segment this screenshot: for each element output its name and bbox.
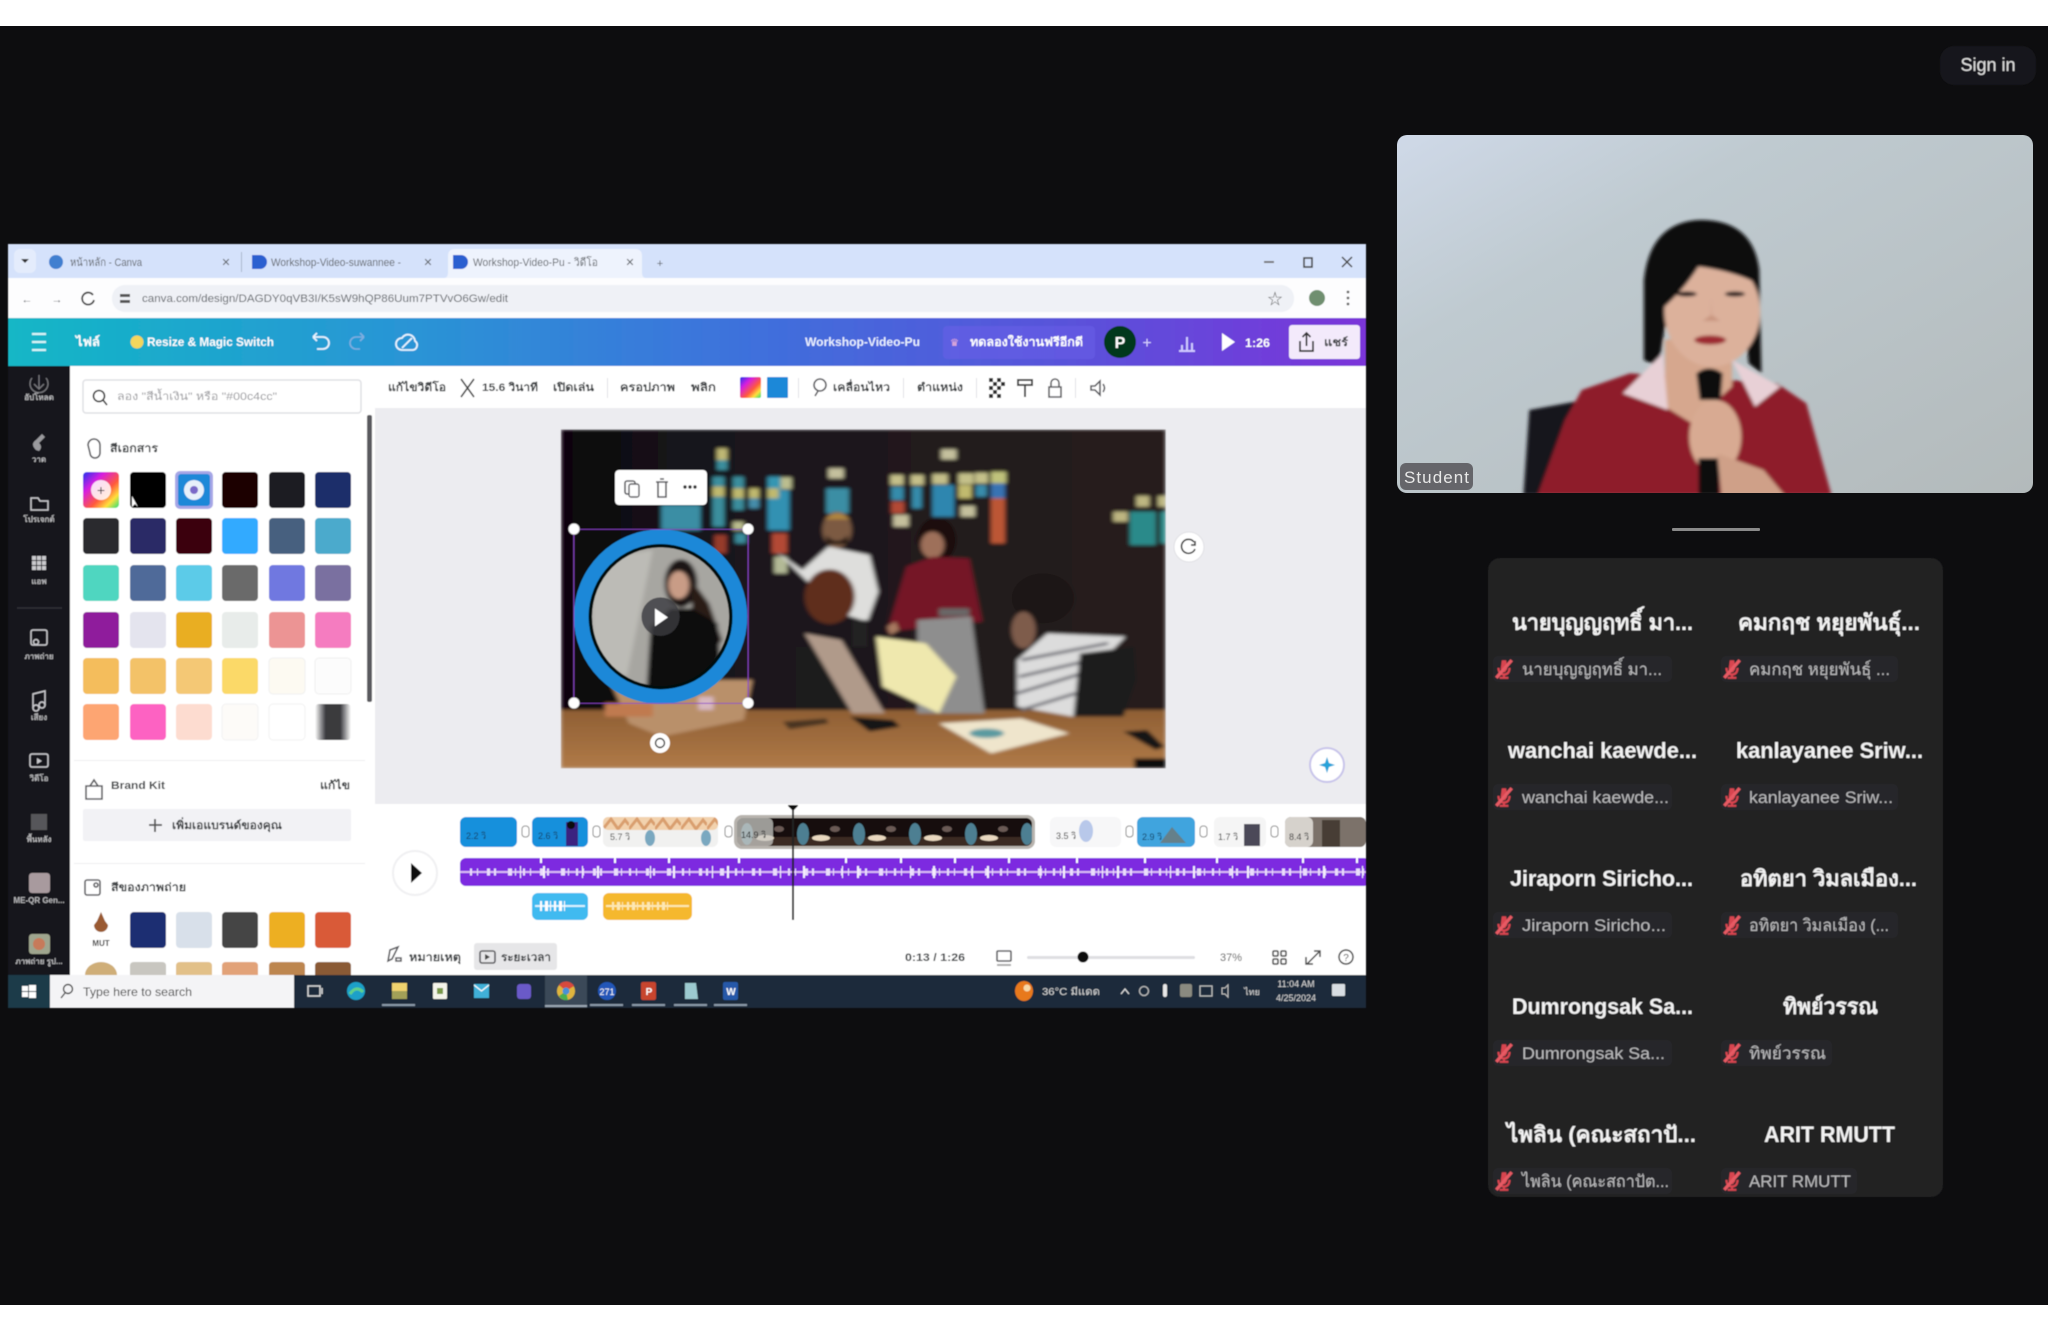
participant: thippawan: ทิพย์วรรณ — [1749, 1044, 1826, 1063]
system tray: 4/25/2024 — [1276, 993, 1316, 1003]
left navigation sidebar: ภาพถ่าย รูป... — [15, 957, 63, 967]
extra audio clips — [532, 893, 692, 920]
editing toolbar: เคลื่อนไหว — [833, 379, 890, 394]
system tray: 36°C มีแดด — [1042, 986, 1100, 998]
left navigation sidebar: โปรเจกต์ — [22, 514, 55, 524]
brand kit row: แก้ไข — [320, 778, 350, 792]
participant: atittaya: อทิตยา วิมลเมือง... — [1740, 866, 1917, 891]
icon: start button — [22, 985, 36, 998]
sign in button: Sign in — [1960, 55, 2016, 75]
presenter figure — [1520, 218, 1834, 493]
timeline footer controls: ? — [1343, 953, 1349, 964]
editing toolbar: 15.6 วินาที — [482, 381, 538, 394]
video clips: 2.2 วิ — [466, 831, 486, 841]
image colours heading: สีของภาพถ่าย — [111, 881, 186, 894]
colour search box — [83, 380, 361, 413]
panel: video timeline — [375, 798, 1370, 975]
browser tab bar: หน้าหลัก - Canva — [70, 257, 143, 269]
left navigation sidebar: พื้นหลัง — [27, 833, 52, 844]
selection handles — [568, 524, 754, 708]
video clips: 8.4 วิ — [1289, 832, 1309, 842]
taskbar search box: Type here to search — [83, 985, 192, 999]
selection frame — [574, 529, 748, 703]
timeline footer controls — [388, 943, 1353, 970]
address bar: canva.com/design/DAGDY0qVB3I/K5sW9hQP86Uum7PTVvO6Gw/edit — [142, 293, 508, 305]
participant: pailin: ไพลิน (คณะสถาปั... — [1505, 1121, 1696, 1147]
participant: atittaya: อทิตยา วิมลเมือง (... — [1749, 916, 1889, 935]
participant: komkrit — [1721, 610, 1920, 682]
editing toolbar — [375, 366, 1366, 408]
meeting table — [561, 710, 1166, 768]
presenter webcam tile — [1397, 135, 2033, 495]
timeline footer controls: ระยะเวลา — [501, 952, 551, 964]
editing toolbar: ครอปภาพ — [620, 381, 675, 394]
image colour swatches: MUT — [92, 939, 110, 948]
timeline footer controls: 37% — [1220, 952, 1242, 964]
participant: boonyarit: นายบุญญฤทธิ์ มา... — [1522, 657, 1662, 680]
video clips: 2.9 วิ — [1142, 832, 1162, 842]
windows taskbar — [8, 975, 1366, 1008]
canva header bar: Workshop-Video-Pu — [805, 335, 920, 349]
participant: arit rmutt: ARIT RMUTT — [1749, 1172, 1851, 1191]
side colour panel — [70, 366, 375, 988]
refresh comment button — [1174, 532, 1204, 562]
taskbar search box — [50, 975, 294, 1008]
participant: arit rmutt — [1721, 1122, 1896, 1194]
video clips: 2.6 วิ — [538, 831, 558, 841]
participant: pailin — [1493, 1121, 1696, 1194]
panel: shared browser window — [8, 244, 1370, 1008]
name tag: student — [1400, 463, 1473, 490]
browser tab bar: ✕ — [625, 257, 635, 269]
participant: dumrongsak: Dumrongsak Sa... — [1512, 994, 1693, 1019]
sticky notes on wall — [661, 448, 1166, 573]
canva header bar: Resize & Magic Switch — [147, 335, 274, 349]
play overlay — [641, 597, 680, 636]
browser tab bar: Workshop-Video-Pu - วิดีโอ — [473, 255, 598, 269]
participant: wanchai: wanchai kaewde... — [1521, 788, 1669, 807]
circular presenter video — [574, 529, 747, 704]
address bar: → — [52, 294, 62, 306]
canva header bar: 1:26 — [1245, 336, 1270, 350]
browser tab bar: Workshop-Video-suwannee - — [271, 257, 401, 269]
video page on canvas — [560, 428, 1166, 769]
canva header bar: + — [1142, 335, 1152, 352]
laptop and papers on table — [605, 680, 1166, 768]
name tag: student: Student — [1404, 468, 1469, 487]
document colour swatches — [83, 471, 351, 740]
top white strip — [0, 0, 2048, 26]
editing toolbar: แก้ไขวิดีโอ — [388, 380, 446, 394]
heading: document colours — [88, 439, 158, 458]
timeline play button — [393, 851, 437, 895]
taskbar app icons: 271 — [599, 987, 615, 997]
taskbar app icons — [308, 975, 747, 1008]
system tray: ไทย — [1243, 987, 1260, 997]
editing toolbar: พลิก — [691, 381, 716, 394]
browser tab bar: ✕ — [221, 257, 231, 269]
brand kit row: Brand Kit — [111, 780, 165, 792]
participant: komkrit: คมกฤช หยุยพันธุ์ ... — [1749, 660, 1890, 680]
left navigation sidebar: อัปโหลด — [24, 392, 54, 402]
timeline footer controls: หมายเหตุ — [409, 952, 461, 965]
video clips — [460, 815, 1366, 849]
participant: kanlayanee — [1721, 738, 1923, 810]
image colours heading — [85, 880, 186, 895]
add brand button: เพิ่มเอแบรนด์ของคุณ — [172, 817, 283, 833]
participant: atittaya — [1721, 866, 1917, 938]
participant: boonyarit — [1493, 606, 1693, 682]
participant: dumrongsak — [1493, 994, 1693, 1066]
participant: thippawan — [1721, 994, 1878, 1066]
participant: dumrongsak: Dumrongsak Sa... — [1522, 1044, 1665, 1063]
left navigation sidebar: แอพ — [31, 577, 47, 586]
video clips: 14.9 วิ — [741, 830, 766, 840]
canva header bar: แชร์ — [1324, 336, 1348, 349]
left navigation sidebar: วิดีโอ — [29, 773, 49, 783]
left navigation sidebar: วาด — [32, 455, 46, 464]
purple audio track — [460, 858, 1370, 886]
browser tab bar: + — [657, 258, 663, 270]
rotate handle — [650, 733, 670, 753]
taskbar app icons: W — [726, 987, 736, 998]
left navigation sidebar: ME-QR Gen... — [13, 896, 65, 905]
taskbar app icons: P — [646, 987, 653, 998]
people in meeting — [776, 512, 1136, 717]
participant: jiraporn — [1493, 866, 1693, 938]
participant: pailin: ไพลิน (คณะสถาปัต... — [1520, 1171, 1669, 1191]
browser tab bar — [8, 244, 1366, 278]
participant: jiraporn: Jiraporn Siricho... — [1510, 866, 1693, 891]
participant: arit rmutt: ARIT RMUTT — [1764, 1122, 1896, 1147]
address bar: ← — [22, 294, 32, 306]
canva header bar: ทดลองใช้งานฟรีอีกดี — [970, 334, 1083, 349]
address bar: ☆ — [1267, 291, 1283, 308]
left navigation sidebar: ภาพถ่าย — [24, 652, 54, 661]
editing toolbar: เปิดเล่น — [553, 381, 595, 394]
canva header bar: ♛ — [950, 338, 959, 349]
document colour swatches: + — [97, 482, 105, 498]
drag handle — [1672, 528, 1760, 531]
playhead — [788, 802, 798, 920]
video clips: 1.7 วิ — [1218, 832, 1238, 842]
canva header bar: ไฟล์ — [74, 334, 100, 349]
canva header bar — [8, 318, 1366, 366]
panel: participants — [1488, 558, 1943, 1197]
left navigation sidebar — [8, 366, 70, 975]
bottom white strip — [0, 1305, 2048, 1331]
participant: jiraporn: Jiraporn Siricho... — [1522, 916, 1666, 935]
participant: wanchai — [1493, 738, 1697, 810]
timeline footer controls: 0:13 / 1:26 — [905, 952, 965, 964]
heading: document colours: สีเอกสาร — [110, 442, 158, 455]
video clips: 5.7 วิ — [610, 832, 630, 842]
participant: komkrit: คมกฤช หยุยพันธุ์... — [1738, 610, 1920, 637]
floating element toolbar — [615, 470, 707, 505]
sign in button — [1940, 46, 2036, 85]
left navigation sidebar: เสียง — [31, 712, 47, 722]
participant: kanlayanee: kanlayanee Sriw... — [1749, 788, 1893, 807]
colour search box: ลอง "สีน้ำเงิน" หรือ "#00c4cc" — [117, 388, 277, 403]
browser tab bar: ✕ — [423, 257, 433, 269]
participant: wanchai: wanchai kaewde... — [1507, 738, 1697, 763]
image colour swatches — [85, 912, 351, 988]
magic assistant button — [1310, 748, 1344, 782]
video clips: 3.5 วิ — [1056, 831, 1076, 841]
canvas workspace background — [375, 408, 1366, 804]
system tray — [1015, 979, 1345, 1003]
address bar — [8, 278, 1366, 318]
participant: thippawan: ทิพย์วรรณ — [1783, 994, 1878, 1019]
brand kit row — [86, 778, 350, 799]
participant: kanlayanee: kanlayanee Sriw... — [1736, 738, 1923, 763]
editing toolbar: ตำแหน่ง — [917, 381, 963, 394]
add brand button — [83, 809, 351, 841]
canva header bar: P — [1115, 335, 1126, 352]
system tray: 11:04 AM — [1277, 979, 1315, 989]
participant: boonyarit: นายบุญญฤทธิ์ มา... — [1512, 606, 1693, 637]
